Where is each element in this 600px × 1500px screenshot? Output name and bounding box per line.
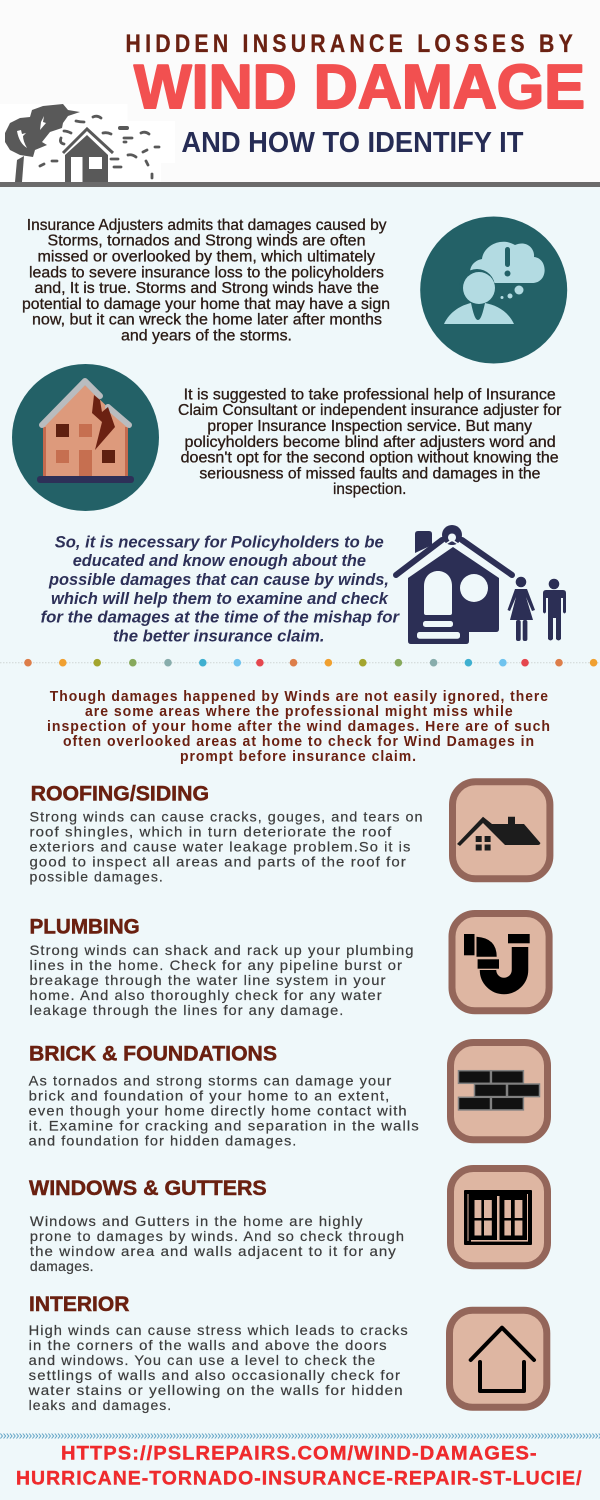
text block: intro paragraph: now, but it can wreck the home later after months: [32, 312, 382, 329]
text block: intro paragraph: and years of the storms.: [121, 327, 292, 344]
footer link: [16, 1443, 582, 1489]
text: plumbing description: Strong winds can shack and rack up your plumbing: [30, 942, 414, 958]
text: roofing description: Strong winds can cause cracks, gouges, and tears on: [30, 809, 424, 825]
text: interior description: leaks and damages.: [29, 1397, 172, 1413]
text block: overlooked areas intro: inspection of your home after the wind damages. Here are of such: [47, 719, 551, 735]
icon: house outline: [450, 1310, 547, 1407]
text block: professional help paragraph: seriousness of missed faults and damages in the: [199, 465, 540, 482]
icon: roof: [452, 782, 550, 879]
callout: educated policyholders: possible damages that can cause by winds,: [48, 570, 389, 589]
panel: plumbing: [30, 914, 549, 1018]
footer link: HTTPS://PSLREPAIRS.COM/WIND-DAMAGES-: [61, 1443, 538, 1464]
text block: professional help paragraph: It is suggested to take professional help of Insurance: [184, 386, 556, 403]
text: windows description: damages.: [30, 1258, 94, 1274]
text block: overlooked areas intro: Though damages happened by Winds are not easily ignored, there: [50, 689, 549, 705]
text: plumbing description: lines in the home. Check for any pipeline burst or: [30, 957, 403, 973]
text: interior description: [28, 1322, 409, 1413]
text: brick description: brick and foundation of your home to an extent,: [29, 1088, 390, 1104]
callout: educated policyholders: for the damages at the time of the mishap for: [41, 608, 400, 627]
dotted colour divider: [24, 659, 597, 666]
text: windows description: prone to damages by winds. And so check through: [30, 1228, 405, 1244]
text block: professional help paragraph: Claim Consultant or independent insurance adjuster for: [178, 402, 561, 419]
heading: interior: INTERIOR: [29, 1292, 130, 1316]
text block: intro paragraph: missed or overlooked by them, which ultimately: [38, 249, 375, 266]
text: roofing description: good to inspect all areas and parts of the roof for: [30, 854, 407, 870]
text block: intro paragraph: Insurance Adjusters admits that damages caused by: [27, 217, 387, 234]
text block: intro paragraph: Storms, tornados and Strong winds are often: [48, 233, 366, 250]
text block: intro paragraph: potential to damage your home that may have a sign: [22, 296, 390, 313]
text block: professional help paragraph: policyholders become blind after adjusters word and: [184, 434, 556, 451]
text: plumbing description: leakage through the lines for any damage.: [30, 1002, 344, 1018]
text: roofing description: possible damages.: [30, 869, 164, 885]
text block: intro paragraph: leads to severe insurance loss to the policyholders: [29, 264, 384, 281]
subtitle: and how to identify it: AND HOW TO IDENTIFY IT: [181, 127, 524, 159]
callout: educated policyholders: which will help them to examine and check: [51, 589, 389, 608]
callout: educated policyholders: So, it is necessary for Policyholders to be: [55, 532, 384, 551]
text: plumbing description: [30, 942, 414, 1018]
callout: educated policyholders: the better insurance claim.: [113, 626, 324, 645]
text: brick description: [29, 1073, 420, 1149]
icon: cracked house in teal circle: [12, 364, 159, 511]
text: windows description: Windows and Gutters in the home are highly: [30, 1213, 364, 1229]
text: windows description: [30, 1213, 405, 1274]
icon: house and tree in the wind: [0, 104, 600, 187]
text: interior description: High winds can cause stress which leads to cracks: [29, 1322, 409, 1338]
icon: pipe: [452, 914, 549, 1011]
panel: interior: [28, 1292, 547, 1413]
panel: roofing/siding: [30, 782, 550, 885]
heading: brick and foundations: BRICK & FOUNDATIONS: [29, 1042, 277, 1066]
icon: house with family: [396, 525, 566, 644]
heading: plumbing: PLUMBING: [30, 914, 140, 938]
callout: educated policyholders: [41, 532, 400, 645]
text: interior description: settlings of walls and also occasionally check for: [29, 1367, 401, 1383]
text: interior description: in the corners of the walls and above the doors: [29, 1337, 388, 1353]
callout: educated policyholders: educated and know enough about the: [73, 551, 366, 570]
text block: overlooked areas intro: often overlooked areas at home to check for Wind Damages in: [63, 734, 535, 750]
text block: overlooked areas intro: are some areas where the professional might miss while: [85, 704, 514, 720]
header band: [0, 0, 600, 187]
text: plumbing description: home. And also thoroughly check for any water: [30, 987, 383, 1003]
text block: professional help paragraph: inspection.: [333, 481, 406, 498]
heading: roofing/siding: ROOFING/SIDING: [31, 782, 209, 806]
text block: overlooked areas intro: [47, 689, 551, 765]
text: interior description: water stains or yellowing on the walls for hidden: [28, 1382, 404, 1398]
text: interior description: and windows. You can use a level to check the: [29, 1352, 376, 1368]
title: wind damage: WIND DAMAGE: [134, 53, 585, 122]
text: brick description: even though your home directly home contact with: [29, 1103, 408, 1119]
text block: intro paragraph: [22, 217, 390, 344]
text block: professional help paragraph: doesn't opt for the second option without knowing the: [181, 450, 559, 467]
icon: bricks: [450, 1042, 548, 1140]
panel: brick and foundations: [29, 1042, 547, 1149]
text: plumbing description: breakage through the water line system in your: [30, 972, 386, 988]
text: windows description: the window area and walls adjacent to it for any: [30, 1243, 397, 1259]
text block: overlooked areas intro: prompt before insurance claim.: [180, 749, 417, 765]
icon: adjuster thinking in teal circle: [420, 216, 567, 364]
text: brick description: As tornados and strong storms can damage your: [29, 1073, 392, 1089]
text block: professional help paragraph: proper Insurance Inspection service. But many: [207, 418, 532, 435]
footer link: HURRICANE-TORNADO-INSURANCE-REPAIR-ST-LUCIE/: [16, 1468, 582, 1489]
panel: windows and gutters: [29, 1168, 548, 1274]
text: brick description: and foundation for hidden damages.: [29, 1133, 297, 1149]
heading: windows and gutters: WINDOWS & GUTTERS: [29, 1176, 267, 1200]
text block: professional help paragraph: [178, 386, 561, 498]
text block: intro paragraph: and, It is true. Storms and Strong winds have the: [34, 280, 379, 297]
text: roofing description: roof shingles, which in turn deteriorate the roof: [30, 824, 392, 840]
text: roofing description: exteriors and cause water leakage problem.So it is: [30, 839, 411, 855]
text: roofing description: [30, 809, 424, 885]
text: brick description: it. Examine for cracking and separation in the walls: [29, 1118, 420, 1134]
icon: window: [450, 1168, 548, 1266]
